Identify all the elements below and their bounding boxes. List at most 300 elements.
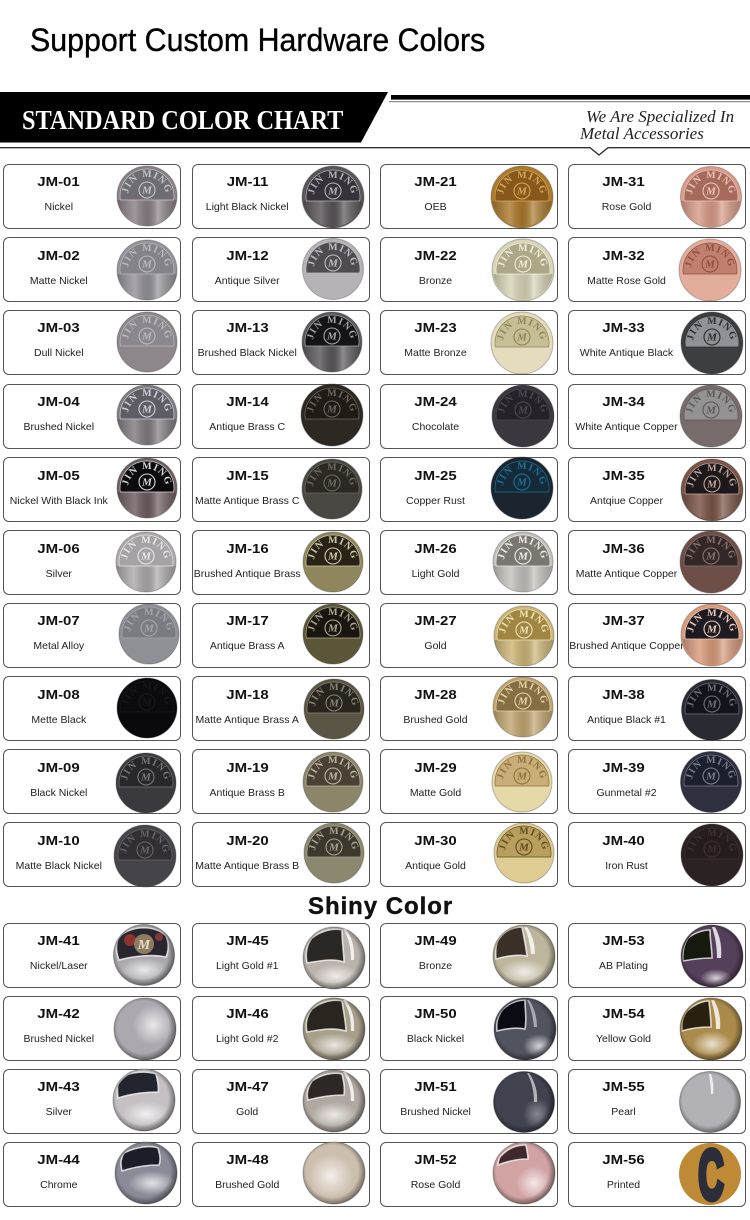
icon: Matte Antique Brass B button: M <box>328 841 340 853</box>
name: Brushed Antique Brass <box>194 568 301 580</box>
icon: Brushed Antique Copper button <box>680 604 744 666</box>
icon: Matte Antique Brass C button <box>302 458 362 520</box>
code: JM-48 <box>226 1152 268 1167</box>
card: JM-31 <box>568 164 746 229</box>
icon: Matte Black Nickel button: M <box>140 844 152 856</box>
code: JM-21 <box>414 174 457 189</box>
icon: Brushed Black Nickel button <box>302 312 362 372</box>
card: JM-32 <box>568 237 746 302</box>
icon: Light Gold button: JIN MING <box>498 536 548 560</box>
icon: Bronze button: M <box>517 259 529 271</box>
card: JM-39 <box>568 749 746 814</box>
icon: Silver button <box>116 532 176 592</box>
code: JM-41 <box>38 933 80 948</box>
icon: Brushed Antique Brass button: M <box>327 551 339 563</box>
card: JM-27 <box>380 603 558 668</box>
icon: Brushed Nickel button: M <box>141 403 153 415</box>
card: JM-42 <box>3 996 181 1061</box>
code: JM-49 <box>414 933 457 948</box>
icon: Printed letter C button <box>678 1142 742 1206</box>
code: JM-01 <box>38 174 80 189</box>
icon: Brushed Black Nickel button: M <box>326 330 338 342</box>
icon: White Antique Copper button <box>680 384 742 448</box>
card: JM-29 <box>380 749 558 814</box>
card: JM-14 <box>192 384 370 449</box>
icon: Gunmetal button: M <box>705 771 717 783</box>
icon: Antique Brass C button: M <box>327 403 339 415</box>
card: JM-01 <box>3 164 181 229</box>
card: JM-16 <box>192 530 370 595</box>
code: JM-20 <box>226 832 268 848</box>
card: JM-10 <box>3 822 181 887</box>
icon: Brushed Nickel button: JIN MING <box>122 389 172 412</box>
code: JM-19 <box>226 760 268 774</box>
name: Printed <box>607 1179 640 1191</box>
title: Support Custom Hardware Colors <box>30 22 485 58</box>
icon: Copper Rust button: M <box>516 477 528 489</box>
icon: Antique Brass B button: JIN MING <box>308 756 358 780</box>
name: AB Plating <box>599 960 648 972</box>
icon: Antique Brass C button <box>300 384 364 446</box>
icon: Matte Antique Brass C button: M <box>326 478 338 490</box>
name: Light Black Nickel <box>206 201 289 213</box>
icon: Silver button: JIN MING <box>121 536 170 560</box>
card: JM-50 <box>380 996 558 1061</box>
tagline <box>580 107 734 143</box>
icon: Black Nickel button <box>116 752 176 814</box>
icon: Nickel/Laser button: M <box>137 938 151 952</box>
card: JM-36 <box>568 530 746 595</box>
card: JM-04 <box>3 384 181 449</box>
icon: Antique Black button <box>681 679 743 741</box>
code: JM-02 <box>38 248 80 262</box>
icon: Bronze shiny button <box>492 924 556 988</box>
card: JM-19 <box>192 749 370 814</box>
name: Brushed Antique Copper <box>569 640 684 652</box>
code: JM-42 <box>38 1006 80 1021</box>
card: JM-13 <box>192 310 370 375</box>
icon: Gold shiny button <box>302 1070 366 1132</box>
icon: Silver button: M <box>140 551 152 563</box>
icon: Nickel button <box>116 166 178 226</box>
card: JM-18 <box>192 676 370 741</box>
icon: Chocolate button <box>492 384 554 448</box>
code: JM-30 <box>414 832 457 848</box>
code: JM-28 <box>414 686 457 702</box>
code: JM-25 <box>414 468 457 482</box>
icon: White Antique Black button <box>680 312 744 374</box>
name: Matte Bronze <box>404 347 467 359</box>
icon: Antique Brass A button <box>302 604 364 664</box>
icon: Matte Black Nickel button <box>114 824 176 888</box>
code: JM-46 <box>226 1006 268 1021</box>
code: JM-29 <box>414 760 457 774</box>
icon: Rose Gold button <box>680 166 742 228</box>
card: JM-09 <box>3 749 181 814</box>
icon: Brushed Black Nickel button: JIN MING <box>307 316 356 340</box>
icon: Nickel With Black Ink button <box>116 458 178 518</box>
name: Matte Antique Brass B <box>195 860 299 872</box>
card: JM-37 <box>568 603 746 668</box>
icon: Antqiue Copper button: M <box>706 478 718 490</box>
icon: Antique Brass B button: M <box>328 770 340 782</box>
card: JM-02 <box>3 237 181 302</box>
icon: Matte Antique Brass C button: JIN MING <box>307 463 356 486</box>
icon: Copper Rust button: JIN MING <box>497 462 546 486</box>
icon: Light Gold shiny button <box>302 998 366 1060</box>
icon: Matte Bronze button: JIN MING <box>497 317 546 340</box>
icon: Nickel With Black Ink button: JIN MING <box>122 462 172 486</box>
name: Chrome <box>40 1179 77 1191</box>
icon: Black Nickel button: JIN MING <box>121 757 170 780</box>
name: Light Gold <box>412 568 459 580</box>
code: JM-44 <box>38 1152 80 1167</box>
icon: Black Nickel button: M <box>141 771 153 783</box>
icon: Antqiue Copper button <box>680 458 744 522</box>
code: JM-39 <box>602 760 645 774</box>
icon: Matte Nickel button: M <box>141 259 153 271</box>
name: Iron Rust <box>605 860 648 872</box>
code: JM-40 <box>602 832 645 848</box>
code: JM-43 <box>38 1079 80 1094</box>
icon: Matte Gold button: JIN MING <box>497 756 546 780</box>
icon: Antique Silver button <box>302 238 364 300</box>
code: JM-52 <box>414 1152 457 1167</box>
icon: Antique Brass B button <box>302 752 364 812</box>
icon: Gold button: M <box>518 624 530 636</box>
name: Brushed Nickel <box>23 1033 94 1045</box>
icon: Gold button: JIN MING <box>499 610 548 634</box>
icon: Matte Antique Brass A button: M <box>328 697 340 709</box>
icon: Antique Brass A button: JIN MING <box>308 608 358 632</box>
card: JM-49 <box>380 923 558 988</box>
name: Matte Rose Gold <box>587 274 666 286</box>
code: JM-13 <box>226 320 268 335</box>
code: JM-35 <box>602 468 645 482</box>
name: Nickel/Laser <box>30 960 88 972</box>
icon: Antique Black button: JIN MING <box>687 684 736 708</box>
icon: Light Black Nickel button: JIN MING <box>308 171 358 194</box>
name: Mette Black <box>31 714 86 726</box>
icon: Matte Rose Gold button: M <box>704 258 716 270</box>
card: JM-33 <box>568 310 746 375</box>
icon: Brushed Nickel dark shiny button <box>492 1070 556 1134</box>
icon: Dull Nickel button: M <box>141 330 153 342</box>
icon: Iron Rust button <box>680 823 744 887</box>
icon: Mette Black button: JIN MING <box>122 682 172 705</box>
icon: Antqiue Copper button: JIN MING <box>687 464 736 488</box>
card: JM-53 <box>568 923 746 988</box>
icon: Matte Rose Gold button: JIN MING <box>685 244 734 268</box>
icon: Antique Brass A button: M <box>327 622 339 634</box>
code: JM-09 <box>38 760 80 774</box>
name: Matte Antique Brass A <box>196 714 299 726</box>
code: JM-11 <box>226 174 268 189</box>
card: JM-43 <box>3 1069 181 1134</box>
code: JM-23 <box>414 320 457 335</box>
card: JM-28 <box>380 676 558 741</box>
name: Brushed Black Nickel <box>198 347 297 359</box>
name: White Antique Black <box>580 347 673 359</box>
name: Black Nickel <box>407 1033 464 1045</box>
tagline: Metal Accessories <box>580 124 704 143</box>
icon: Nickel button: JIN MING <box>122 170 172 194</box>
icon: Light Black Nickel button <box>302 166 364 228</box>
code: JM-24 <box>414 394 457 409</box>
icon: Matte Antique Copper button: JIN MING <box>686 536 736 560</box>
icon: Matte Antique Brass B button: JIN MING <box>309 827 358 850</box>
name: Matte Gold <box>410 786 461 798</box>
icon: Yellow Gold shiny button <box>680 998 742 1060</box>
card: JM-46 <box>192 996 370 1061</box>
code: JM-07 <box>38 613 80 628</box>
code: JM-14 <box>226 394 268 409</box>
code: JM-22 <box>414 248 457 262</box>
card: JM-17 <box>192 603 370 668</box>
code: JM-27 <box>414 613 457 628</box>
icon: Iron Rust button: M <box>706 843 718 855</box>
name: Brushed Nickel <box>23 421 94 433</box>
name: Antique Black #1 <box>587 714 666 726</box>
name: Metal Alloy <box>33 640 84 652</box>
icon: Brushed Gold button <box>492 676 554 738</box>
code: JM-37 <box>602 613 645 628</box>
name: Dull Nickel <box>34 347 84 359</box>
code: JM-26 <box>414 540 457 556</box>
icon: Matte Nickel button <box>116 240 178 300</box>
card: JM-21 <box>380 164 558 229</box>
card: JM-22 <box>380 237 558 302</box>
name: Chocolate <box>412 421 459 433</box>
icon: Matte Black Nickel button: JIN MING <box>120 830 170 854</box>
card: JM-08 <box>3 676 181 741</box>
icon: White Antique Black button: M <box>706 331 718 343</box>
header banner <box>0 92 750 156</box>
icon: White Antique Copper button: JIN MING <box>686 390 736 414</box>
code: JM-15 <box>226 468 268 482</box>
icon: Antique Silver button: JIN MING <box>308 243 358 266</box>
code: JM-03 <box>38 320 80 335</box>
icon: Matte Gold button: M <box>516 770 528 782</box>
card: JM-07 <box>3 603 181 668</box>
card: JM-48 <box>192 1142 370 1207</box>
icon: Antique Silver button: M <box>327 257 339 269</box>
icon: Silver shiny button <box>112 1068 176 1132</box>
icon: Brushed Gold button: M <box>517 696 529 708</box>
card: JM-05 <box>3 457 181 522</box>
icon: Bronze button: JIN MING <box>498 244 548 268</box>
card: JM-12 <box>192 237 370 302</box>
icon: Gunmetal button: JIN MING <box>686 756 736 780</box>
name: Matte Antique Brass C <box>195 494 299 506</box>
icon: Rose Gold button: JIN MING <box>686 171 736 194</box>
icon: Chocolate button: M <box>517 405 529 417</box>
icon: OEB button: JIN MING <box>497 171 546 194</box>
icon: Antique Brass C button: JIN MING <box>307 389 356 412</box>
icon: Bronze button <box>492 238 554 302</box>
card: JM-54 <box>568 996 746 1061</box>
card: JM-20 <box>192 822 370 887</box>
name: Brushed Gold <box>215 1179 279 1191</box>
code: JM-12 <box>226 248 268 262</box>
card: JM-56 <box>568 1142 746 1207</box>
icon: Matte Gold button <box>492 752 552 812</box>
card: JM-52 <box>380 1142 558 1207</box>
icon: Matte Antique Brass A button <box>304 678 364 740</box>
icon: Matte Nickel button: JIN MING <box>122 244 172 268</box>
card: JM-11 <box>192 164 370 229</box>
card: JM-35 <box>568 457 746 522</box>
name: Nickel <box>44 201 73 213</box>
icon: Antique Black button: M <box>706 698 718 710</box>
card: JM-06 <box>3 530 181 595</box>
code: JM-33 <box>602 320 645 335</box>
icon: Copper Rust button <box>490 456 554 520</box>
code: JM-10 <box>38 832 80 848</box>
name: Light Gold #2 <box>216 1033 278 1045</box>
code: JM-08 <box>38 686 80 702</box>
name: Nickel With Black Ink <box>10 494 108 506</box>
icon: Metal Alloy button: JIN MING <box>124 608 174 632</box>
icon: Matte Rose Gold button <box>678 238 742 302</box>
name: Matte Nickel <box>30 274 88 286</box>
card: JM-03 <box>3 310 181 375</box>
code: JM-54 <box>602 1006 645 1021</box>
icon: Matte Bronze button <box>490 312 554 374</box>
code: JM-47 <box>226 1079 268 1094</box>
code: JM-51 <box>414 1079 457 1094</box>
icon: Brushed Gold shiny button <box>302 1141 366 1205</box>
icon: Metal Alloy button: M <box>143 622 155 634</box>
name: Silver <box>46 568 72 580</box>
icon: White Antique Copper button: M <box>705 404 717 416</box>
code: JM-16 <box>226 540 268 556</box>
name: Gold <box>236 1106 258 1118</box>
name: White Antique Copper <box>575 421 678 433</box>
icon: OEB button: M <box>516 186 528 198</box>
icon: Mette Black button: M <box>141 696 153 708</box>
name: Black Nickel <box>30 786 87 798</box>
code: JM-45 <box>226 933 268 948</box>
code: JM-55 <box>602 1079 645 1094</box>
heading: shiny color: Shiny Color <box>308 893 453 920</box>
icon: Nickel/Laser button <box>113 924 175 986</box>
icon: Dull Nickel button: JIN MING <box>122 316 172 340</box>
icon: Pearl shiny button <box>678 1070 742 1134</box>
icon: Light Black Nickel button: M <box>327 185 339 197</box>
name: Silver <box>46 1106 72 1118</box>
icon: Brushed Antique Brass button: JIN MING <box>308 536 358 560</box>
icon: Antique Gold button: JIN MING <box>499 827 548 850</box>
name: Rose Gold <box>411 1179 460 1191</box>
icon: Dull Nickel button <box>116 312 178 372</box>
icon: Antique Gold button: M <box>518 841 530 853</box>
card: JM-55 <box>568 1069 746 1134</box>
heading: standard color chart: STANDARD COLOR CHART <box>22 105 343 135</box>
name: Antique Brass A <box>210 640 285 652</box>
icon: Light Gold shiny button <box>302 926 366 990</box>
icon: Matte Bronze button: M <box>516 332 528 344</box>
icon: Light Gold button <box>492 532 554 592</box>
name: Rose Gold <box>602 201 651 213</box>
icon: Gunmetal button <box>679 750 743 814</box>
name: Antique Gold <box>405 860 466 872</box>
icon: Matte Antique Brass A button: JIN MING <box>309 683 358 706</box>
name: Matte Antique Copper <box>576 568 677 580</box>
icon: OEB button <box>490 166 554 228</box>
card: JM-26 <box>380 530 558 595</box>
icon: AB Plating shiny button <box>680 924 744 988</box>
name: Yellow Gold <box>596 1033 651 1045</box>
name: Bronze <box>419 960 452 972</box>
name: Pearl <box>611 1106 636 1118</box>
card: JM-23 <box>380 310 558 375</box>
code: JM-06 <box>38 540 80 556</box>
code: JM-50 <box>414 1006 457 1021</box>
icon: Metal Alloy button <box>118 604 180 664</box>
code: JM-34 <box>602 394 645 409</box>
card: JM-34 <box>568 384 746 449</box>
code: JM-32 <box>602 248 645 262</box>
icon: White Antique Black button: JIN MING <box>687 317 736 340</box>
card: JM-47 <box>192 1069 370 1134</box>
icon: Antique Gold button <box>494 822 554 884</box>
card: JM-45 <box>192 923 370 988</box>
name: Bronze <box>419 274 452 286</box>
code: JM-31 <box>602 174 645 189</box>
icon: Brushed Nickel shiny button <box>113 996 177 1060</box>
tagline: We Are Specialized In <box>586 107 734 126</box>
icon: Brushed Nickel button <box>116 384 178 446</box>
code: JM-17 <box>226 613 268 628</box>
icon: Nickel button: M <box>141 184 153 196</box>
icon: Brushed Gold button: JIN MING <box>498 681 548 704</box>
card: JM-30 <box>380 822 558 887</box>
icon: Matte Antique Copper button <box>680 530 742 594</box>
code: JM-38 <box>602 686 645 702</box>
icon: Brushed Antique Copper button: M <box>706 623 718 635</box>
code: JM-05 <box>38 468 80 482</box>
icon: Brushed Antique Brass button <box>302 532 364 592</box>
icon: Rose Gold button: M <box>705 186 717 198</box>
card: JM-38 <box>568 676 746 741</box>
code: JM-04 <box>38 394 80 409</box>
code: JM-18 <box>226 686 268 702</box>
card: JM-51 <box>380 1069 558 1134</box>
card: JM-24 <box>380 384 558 449</box>
icon: Gold button <box>494 606 554 666</box>
name: Light Gold #1 <box>216 960 278 972</box>
icon: Rose Gold shiny button <box>492 1142 556 1204</box>
name: OEB <box>424 201 447 213</box>
name: Matte Black Nickel <box>16 860 102 872</box>
icon: Nickel With Black Ink button: M <box>141 477 153 489</box>
name: Antique Brass C <box>209 421 285 433</box>
code: JM-53 <box>602 933 645 948</box>
icon: Iron Rust button: JIN MING <box>687 830 736 852</box>
code: JM-36 <box>602 540 645 556</box>
card: JM-25 <box>380 457 558 522</box>
icon: Chocolate button: JIN MING <box>498 390 548 414</box>
name: Antique Brass B <box>210 786 285 798</box>
name: Brushed Gold <box>403 714 468 726</box>
name: Antqiue Copper <box>590 494 663 506</box>
card: JM-41 <box>3 923 181 988</box>
card: JM-15 <box>192 457 370 522</box>
name: Antique Silver <box>215 274 280 286</box>
card: JM-40 <box>568 822 746 887</box>
name: Copper Rust <box>406 494 465 506</box>
